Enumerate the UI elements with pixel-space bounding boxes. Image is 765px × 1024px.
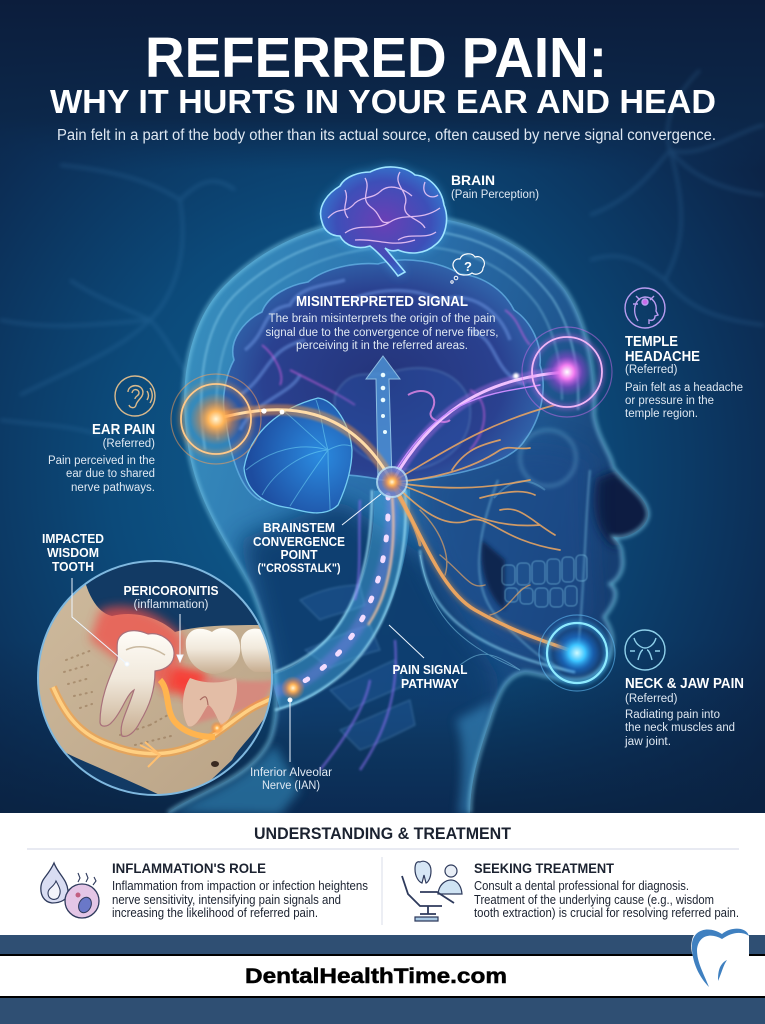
misinterpreted signal text: perceiving it in the referred areas. bbox=[296, 340, 468, 352]
icon: neck and jaw bbox=[625, 630, 665, 670]
temple headache text: temple region. bbox=[625, 408, 698, 420]
neck and jaw pain text bbox=[624, 676, 744, 748]
title: REFERRED PAIN: bbox=[145, 26, 607, 90]
brainstem convergence label: ("CROSSTALK") bbox=[258, 563, 341, 575]
brainstem convergence label: POINT bbox=[280, 548, 318, 562]
panel heading: UNDERSTANDING & TREATMENT bbox=[254, 824, 512, 843]
temple headache text: HEADACHE bbox=[625, 348, 700, 365]
inferior alveolar nerve label bbox=[250, 767, 332, 792]
temple headache text: (Referred) bbox=[625, 364, 678, 376]
inflammation's role text: nerve sensitivity, intensifying pain signals and bbox=[112, 893, 341, 907]
temple headache text: TEMPLE bbox=[625, 333, 678, 350]
neck and jaw pain text: the neck muscles and bbox=[625, 722, 735, 734]
brainstem convergence label: BRAINSTEM bbox=[263, 521, 335, 535]
seeking treatment text: Treatment of the underlying cause (e.g., wisdom bbox=[474, 893, 714, 907]
bone bbox=[39, 584, 271, 794]
panel: understanding and treatment bbox=[0, 813, 765, 935]
spinal pain signal pathway bbox=[275, 490, 406, 770]
pericoronitis label: (inflammation) bbox=[134, 599, 209, 611]
icon: temple head bbox=[625, 288, 665, 328]
misinterpreted signal text bbox=[266, 293, 498, 352]
misinterpreted signal text: MISINTERPRETED SIGNAL bbox=[296, 293, 468, 310]
impacted wisdom tooth label: WISDOM bbox=[47, 546, 99, 560]
orange nerve fan to face bbox=[392, 405, 575, 652]
brainstem convergence label: CONVERGENCE bbox=[253, 535, 345, 549]
brainstem convergence hub bbox=[377, 467, 407, 497]
ear pain text: EAR PAIN bbox=[92, 422, 155, 438]
title: WHY IT HURTS IN YOUR EAR AND HEAD bbox=[50, 83, 716, 120]
footer band bbox=[0, 935, 765, 1024]
seeking treatment text bbox=[474, 860, 739, 920]
seeking treatment text: Consult a dental professional for diagnosis. bbox=[474, 879, 689, 893]
cerebellum bbox=[244, 398, 352, 513]
dental cross-section circle bbox=[37, 560, 273, 796]
up arrow: signal to brain bbox=[366, 356, 400, 480]
icon: tooth logo bbox=[691, 928, 749, 987]
second molar bbox=[186, 628, 240, 674]
neck and jaw pain text: Radiating pain into bbox=[625, 709, 720, 721]
inner brain bbox=[224, 260, 543, 500]
misinterpreted signal text: signal due to the convergence of nerve fibers, bbox=[266, 327, 498, 339]
ear pain text: (Referred) bbox=[103, 438, 155, 450]
brain label: BRAIN bbox=[451, 172, 495, 188]
ear pain text: Pain perceived in the bbox=[48, 455, 155, 467]
jaw pain glow bbox=[539, 615, 615, 691]
inflammation's role text bbox=[112, 860, 368, 920]
icon: flame and inflamed cell bbox=[41, 863, 99, 918]
temple headache text: Pain felt as a headache bbox=[625, 382, 743, 394]
temple headache text: or pressure in the bbox=[625, 395, 714, 407]
inflammation's role text: INFLAMMATION'S ROLE bbox=[112, 860, 266, 876]
website: DentalHealthTime.com bbox=[245, 965, 507, 988]
pericoronitis label bbox=[124, 584, 218, 611]
inflammation's role text: Inflammation from impaction or infection heightens bbox=[112, 879, 368, 893]
temple pain glow bbox=[522, 327, 612, 417]
vertebrae bbox=[300, 585, 415, 750]
impacted wisdom tooth label bbox=[42, 532, 104, 574]
misinterpreted signal text: The brain misinterprets the origin of the pain bbox=[268, 313, 496, 325]
ear pain text: nerve pathways. bbox=[71, 482, 155, 494]
third molar bbox=[241, 629, 270, 672]
brainstem convergence label bbox=[253, 521, 345, 575]
pain signal pathway label: PAIN SIGNAL bbox=[392, 663, 468, 677]
inferior alveolar nerve label: Nerve (IAN) bbox=[262, 780, 320, 792]
inferior alveolar nerve label: Inferior Alveolar bbox=[250, 767, 332, 779]
ear pain text bbox=[48, 422, 155, 494]
icon: tooth, dentist and dental chair bbox=[402, 861, 462, 921]
impacted wisdom tooth label: IMPACTED bbox=[42, 532, 104, 546]
icon: question thought bubble bbox=[451, 254, 484, 283]
background bbox=[0, 0, 765, 815]
purple signal to temple bbox=[392, 372, 567, 482]
pericoronitis label: PERICORONITIS bbox=[124, 584, 218, 598]
pain signal pathway label: PATHWAY bbox=[401, 677, 460, 691]
subtitle: Pain felt in a part of the body other than its actual source, often caused by nerve signal convergence. bbox=[57, 127, 716, 144]
pain signal pathway label bbox=[392, 663, 468, 691]
brain label: (Pain Perception) bbox=[451, 189, 539, 201]
neck and jaw pain text: jaw joint. bbox=[624, 736, 671, 748]
temple headache text bbox=[625, 333, 743, 420]
icon: question thought bubble: ? bbox=[464, 259, 472, 274]
icon: ear bbox=[115, 376, 155, 416]
neck and jaw pain text: (Referred) bbox=[625, 693, 678, 705]
wisdom tooth bbox=[100, 631, 174, 736]
seeking treatment text: SEEKING TREATMENT bbox=[474, 860, 614, 876]
title bbox=[50, 26, 716, 120]
ear pain glow bbox=[171, 374, 261, 464]
ear pain text: ear due to shared bbox=[66, 468, 155, 480]
inflammation's role text: increasing the likelihood of referred pain. bbox=[112, 906, 318, 920]
impacted wisdom tooth label: TOOTH bbox=[52, 560, 94, 574]
orange signal to ear bbox=[216, 408, 392, 482]
nerve glow point bbox=[281, 676, 305, 700]
neck and jaw pain text: NECK & JAW PAIN bbox=[625, 676, 744, 692]
head silhouette bbox=[150, 216, 660, 820]
decorative neurons bbox=[0, 70, 764, 435]
top brain bbox=[321, 167, 447, 276]
seeking treatment text: tooth extraction) is crucial for resolving referred pain. bbox=[474, 906, 739, 920]
inferior alveolar nerve bbox=[53, 687, 293, 754]
pointer lines bbox=[72, 494, 424, 762]
brain label bbox=[451, 172, 539, 201]
skull teeth and jaw bbox=[420, 430, 590, 672]
